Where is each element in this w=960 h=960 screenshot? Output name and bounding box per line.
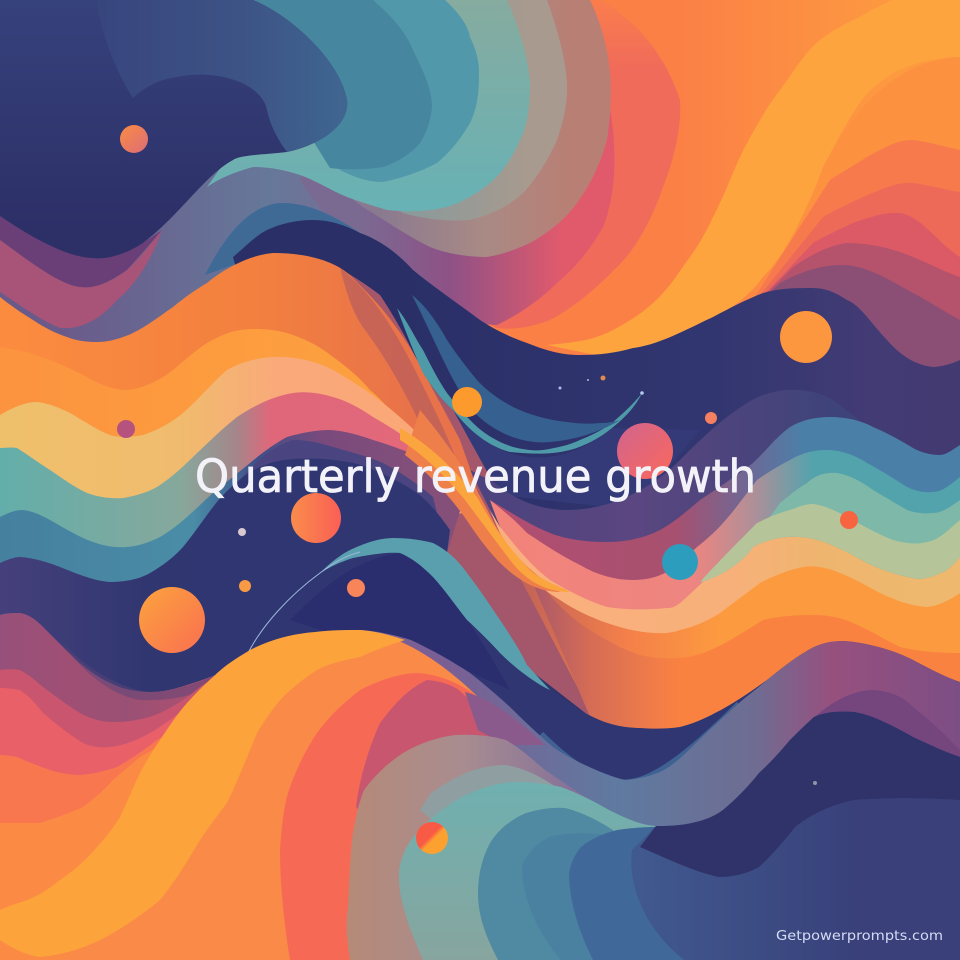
top base band (0, 0, 960, 400)
bottom blue band two (522, 833, 660, 960)
rust diagonal base (273, 253, 620, 740)
salmon band (280, 673, 478, 960)
sage band right (700, 473, 960, 582)
left orange band (0, 690, 260, 960)
navy field (233, 220, 960, 600)
yellow to peach band (490, 510, 960, 730)
teal to salmon band (490, 450, 960, 730)
orange under yellow (760, 57, 960, 400)
blue to magenta band (490, 417, 960, 730)
circle (238, 528, 246, 536)
bottom teal band (399, 782, 680, 960)
rust wash on crest (340, 268, 460, 470)
circle (291, 493, 341, 543)
circle (640, 391, 644, 395)
decorative circles (117, 125, 858, 854)
circle (813, 781, 817, 785)
circle (558, 386, 562, 390)
red band (300, 0, 614, 325)
orange streak (405, 410, 560, 592)
circle (705, 412, 717, 424)
left red orange band (0, 680, 260, 960)
navy fade on magenta (60, 640, 253, 700)
circle (587, 379, 589, 381)
lower right light navy (631, 712, 960, 960)
title: Quarterly revenue growth (195, 450, 756, 503)
blue to plum band (0, 430, 462, 600)
centre navy and lower field (0, 458, 960, 960)
lower right dark navy (640, 712, 960, 877)
circle (662, 544, 698, 580)
bottom wave group (0, 613, 960, 960)
teal to pink band (0, 392, 468, 600)
circle (120, 125, 148, 153)
dark navy under ribbon (290, 553, 510, 690)
purple inner right (790, 690, 960, 800)
yellow streak (400, 428, 570, 592)
circle (239, 580, 251, 592)
orange crest (0, 253, 567, 600)
tan outer band (300, 0, 611, 257)
teal band (250, 0, 479, 182)
bottom blue band three (569, 827, 700, 960)
top roof orange (440, 0, 960, 400)
circle (347, 579, 365, 597)
left pink strip (0, 230, 162, 328)
dark teal band (253, 0, 432, 169)
top yellow band (547, 0, 960, 356)
ribbon teal top (397, 308, 642, 454)
centre teal ribbon (247, 538, 550, 690)
upper left navy (0, 0, 347, 258)
circle (416, 822, 448, 854)
light orange band (0, 329, 567, 600)
bottom blue band one (478, 808, 650, 960)
tan inner band (300, 0, 567, 221)
left purple strip (0, 216, 162, 288)
salmon band (440, 0, 680, 329)
top wave group (0, 0, 960, 400)
circle (840, 511, 858, 529)
deep orange band right (525, 565, 960, 740)
plum inner band (240, 440, 447, 600)
watermark: Getpowerprompts.com (776, 929, 943, 944)
ribbon blue inner (412, 295, 620, 442)
purple patch (465, 692, 545, 745)
yellow band (0, 357, 477, 600)
lighter tan band (420, 765, 561, 860)
teal ribbon (320, 538, 550, 690)
circle (117, 420, 135, 438)
orange band right of yellow (60, 630, 478, 960)
purple lump band (470, 390, 960, 730)
circle (452, 387, 482, 417)
bottom tan band (347, 735, 585, 960)
blue ribbon over navy (205, 203, 420, 280)
left magenta band (0, 613, 300, 960)
left rose band (0, 660, 260, 960)
upper left slate blue (97, 0, 347, 152)
circle (600, 376, 606, 380)
patch below ribbon (453, 410, 700, 510)
orange band right (500, 540, 960, 730)
blue sliver under navy (540, 705, 740, 784)
left pink band (0, 660, 260, 960)
circle (780, 311, 832, 363)
middle diagonal wave group (0, 253, 960, 960)
bottom yellow band (0, 630, 405, 957)
pale sage band right (700, 504, 960, 582)
sage band (207, 0, 530, 211)
thin arc (247, 552, 360, 655)
circle (617, 423, 673, 479)
circle (139, 587, 205, 653)
right fan bands (740, 140, 960, 400)
bottom base band (0, 613, 960, 960)
magenta band (356, 680, 500, 860)
